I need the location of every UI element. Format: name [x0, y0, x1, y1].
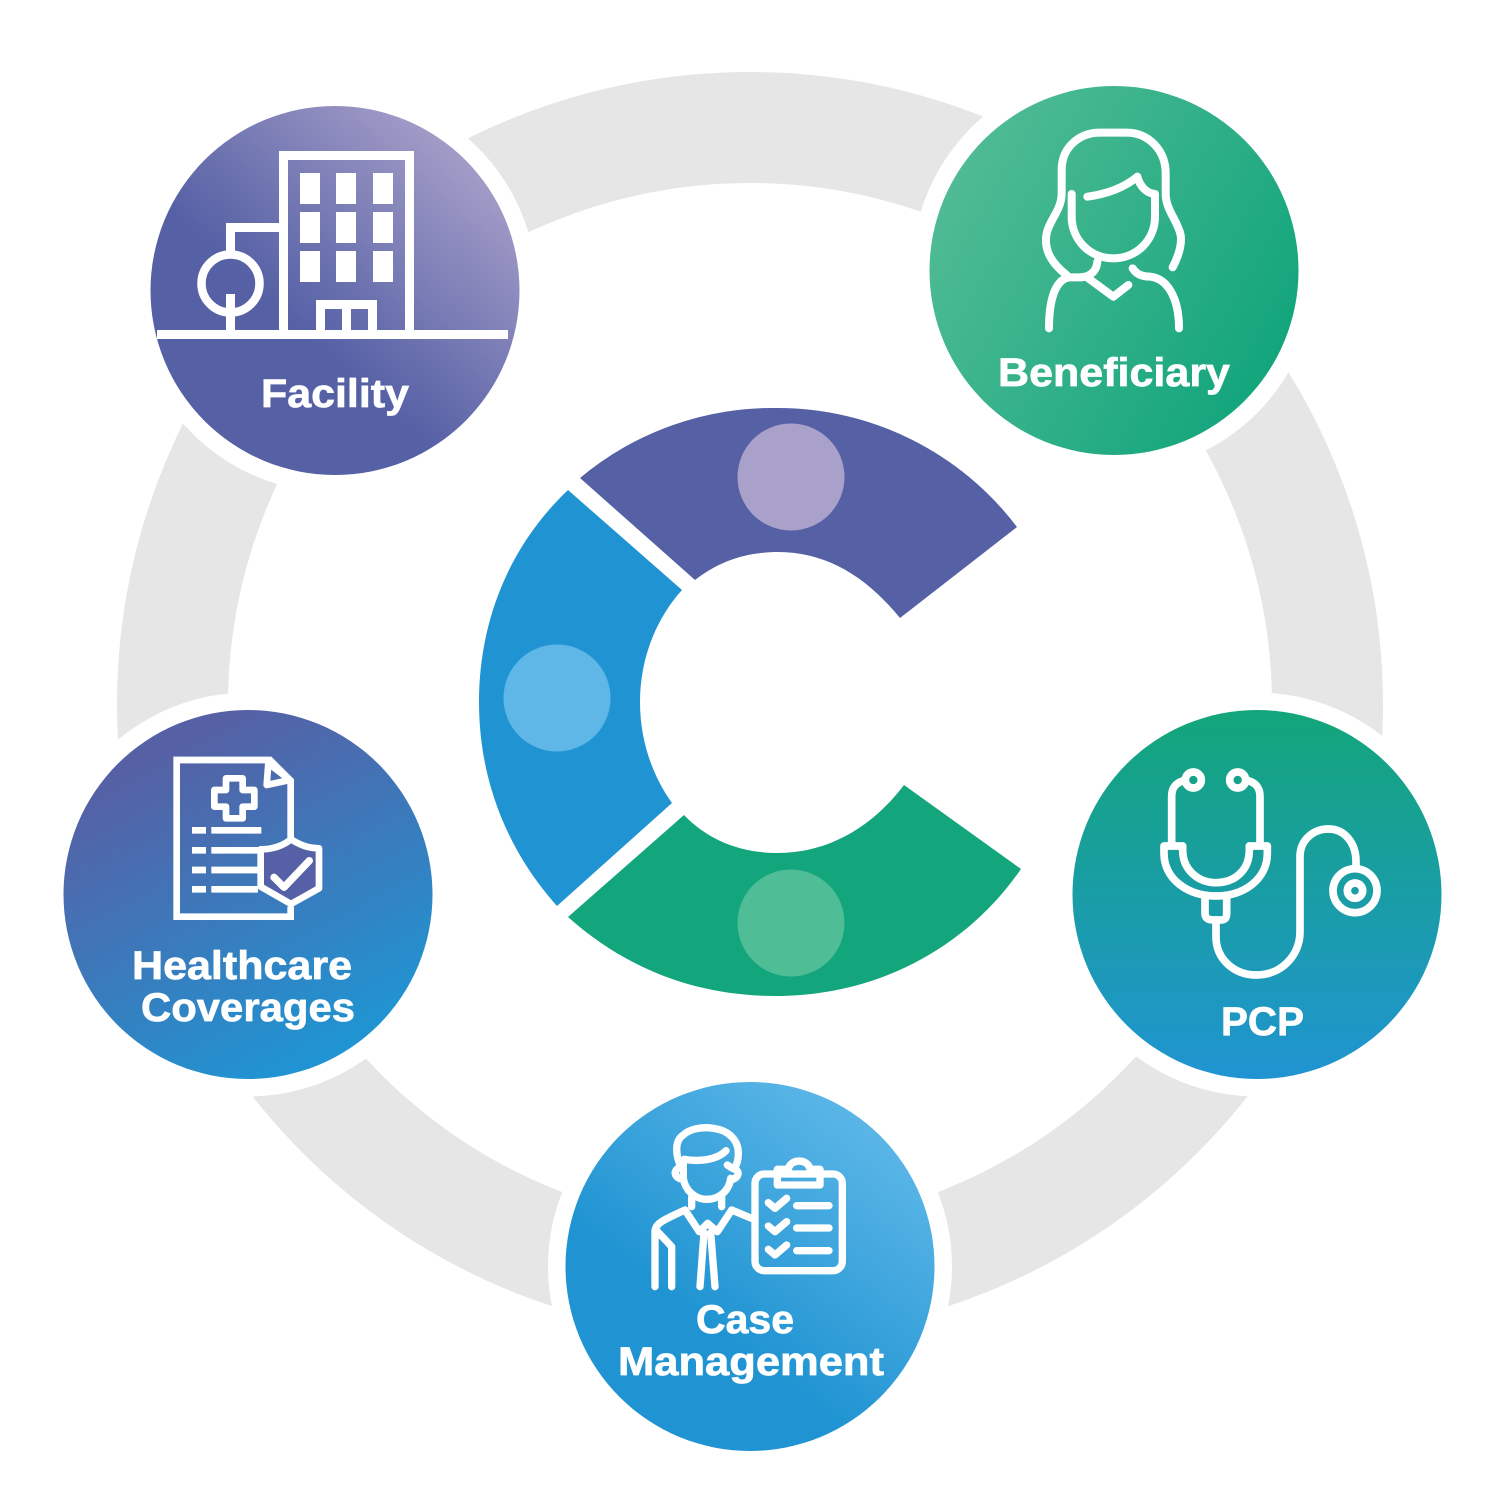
label: Beneficiary: Beneficiary — [998, 351, 1231, 395]
label: Case Management: Management — [618, 1340, 884, 1384]
panel: Facility — [150, 106, 520, 475]
label: Case Management: Case — [696, 1298, 794, 1342]
icon: manager with clipboard — [655, 1128, 842, 1287]
icon: stethoscope — [1164, 772, 1377, 975]
icon: insurance document with shield — [177, 760, 319, 917]
C segment: green — [568, 785, 1021, 996]
label: Healthcare Coverages — [132, 944, 355, 1030]
icon: woman — [1046, 133, 1181, 328]
panel: PCP — [1072, 710, 1442, 1079]
label: Healthcare Coverages: Healthcare — [132, 944, 352, 988]
C segment: blue — [479, 490, 682, 906]
label: Healthcare Coverages: Coverages — [141, 986, 355, 1030]
panel: Beneficiary — [930, 86, 1298, 455]
icon: hospital building — [157, 156, 508, 334]
label: Facility: Facility — [261, 372, 410, 416]
C segment: purple — [580, 408, 1017, 618]
panel: Healthcare Coverages — [64, 710, 432, 1079]
label: PCP: PCP — [1221, 1000, 1304, 1044]
central C logo — [479, 408, 1021, 996]
label: Case Management — [618, 1298, 884, 1384]
panel: Case Management — [566, 1082, 934, 1451]
